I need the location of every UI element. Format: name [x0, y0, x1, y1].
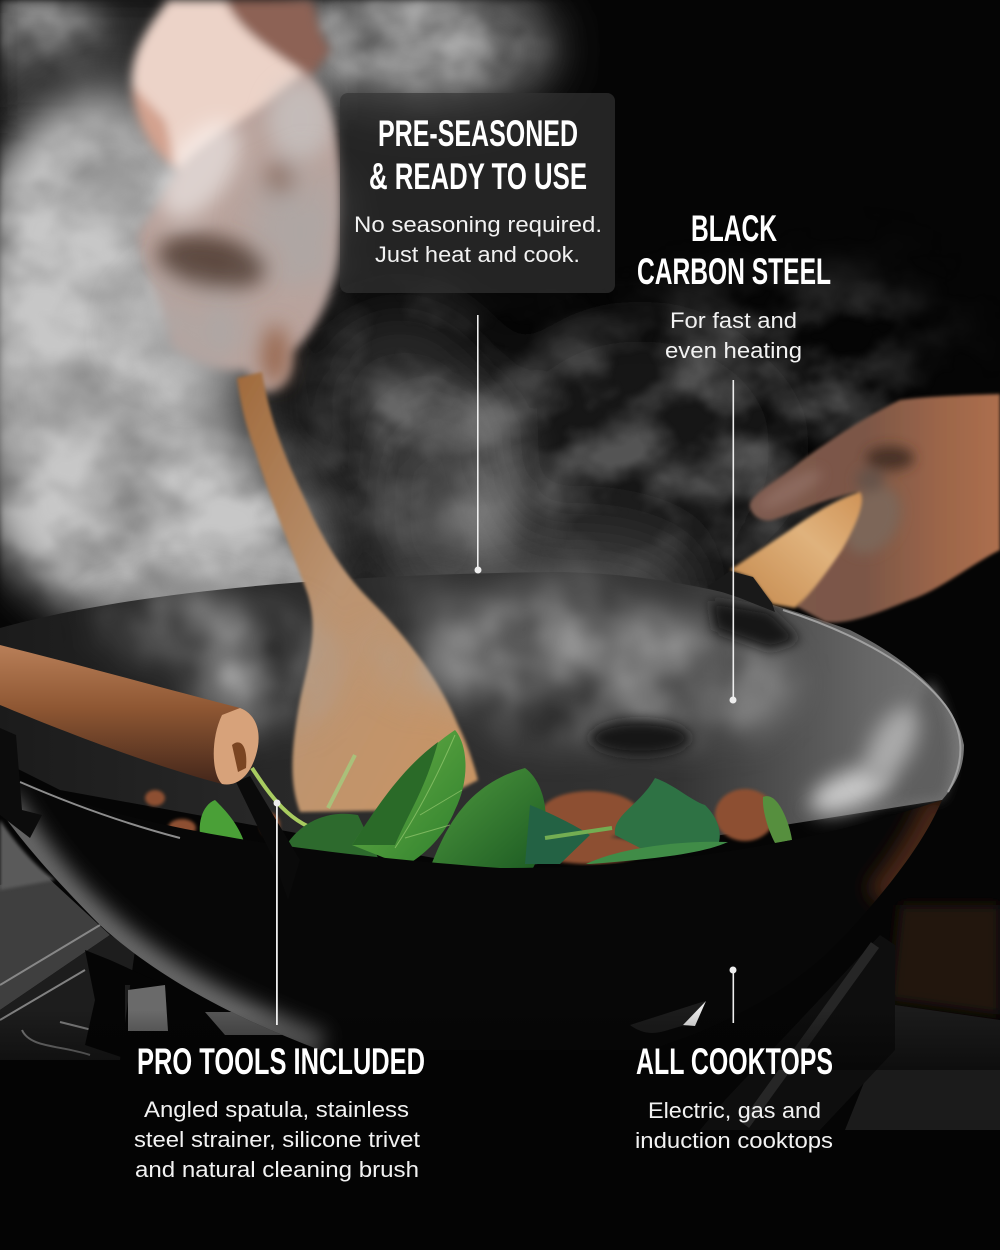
strainer handle: [236, 776, 300, 900]
heading: all cooktops: ALL COOKTOPS: [636, 1041, 833, 1082]
left wooden wok handle: [0, 645, 259, 784]
heading: black carbon steel: [637, 208, 831, 292]
steam over wok: [100, 580, 800, 755]
bottom fade to black: [0, 1010, 1000, 1250]
text: pro tools description: Angled spatula, stainless: [144, 1097, 409, 1122]
heading: black carbon steel: CARBON STEEL: [637, 251, 831, 292]
text: pro tools description: steel strainer, silicone trivet: [134, 1127, 420, 1152]
block: black carbon steel: [637, 208, 831, 363]
dim backdrop haze: [0, 0, 790, 680]
block: pro tools included: [134, 1041, 425, 1182]
wooden spatula: [237, 372, 478, 812]
wok food: greens: [200, 730, 792, 870]
heading: pre-seasoned: PRE-SEASONED: [378, 113, 578, 154]
steam behind subject: [0, 0, 950, 670]
wok interior shine: [783, 610, 960, 822]
wok rim highlight: [20, 782, 180, 838]
text: pre-seasoned description: Just heat and cook.: [375, 242, 580, 267]
stove, right side: [630, 905, 1000, 1130]
callout line: pre-seasoned: [474, 315, 482, 574]
text: pro tools description: and natural cleaning brush: [135, 1157, 419, 1182]
panel: pre-seasoned: [340, 93, 615, 293]
text: pre-seasoned description: No seasoning required.: [354, 212, 602, 237]
text: pre-seasoned description: [354, 212, 602, 267]
left wok bracket: [0, 728, 42, 838]
text: carbon steel description: For fast and: [670, 308, 797, 333]
wok food: ground meat: [145, 789, 775, 864]
wok interior: [0, 572, 964, 870]
heading: black carbon steel: BLACK: [691, 208, 777, 249]
text: cooktops description: [635, 1098, 833, 1153]
block: all cooktops: [635, 1041, 833, 1153]
callout line: pro tools: [274, 800, 280, 1025]
right hand: [750, 394, 1000, 622]
callout line: all cooktops: [730, 966, 736, 1023]
wok outer body: [8, 784, 942, 1050]
hand holding spatula: [132, 0, 342, 392]
text: carbon steel description: even heating: [665, 338, 802, 363]
steam over hand: [120, 160, 350, 390]
heading: pre-seasoned: [369, 113, 587, 197]
stove, left side: [0, 820, 285, 1060]
text: cooktops description: Electric, gas and: [648, 1098, 821, 1123]
text: pro tools description: [134, 1097, 420, 1182]
callout line: carbon steel: [730, 380, 736, 704]
text: carbon steel description: [665, 308, 802, 363]
text: cooktops description: induction cooktops: [635, 1128, 833, 1153]
heading: pre-seasoned: & READY TO USE: [369, 156, 587, 197]
heading: pro tools: PRO TOOLS INCLUDED: [137, 1041, 425, 1082]
right wooden handle: [707, 492, 862, 612]
